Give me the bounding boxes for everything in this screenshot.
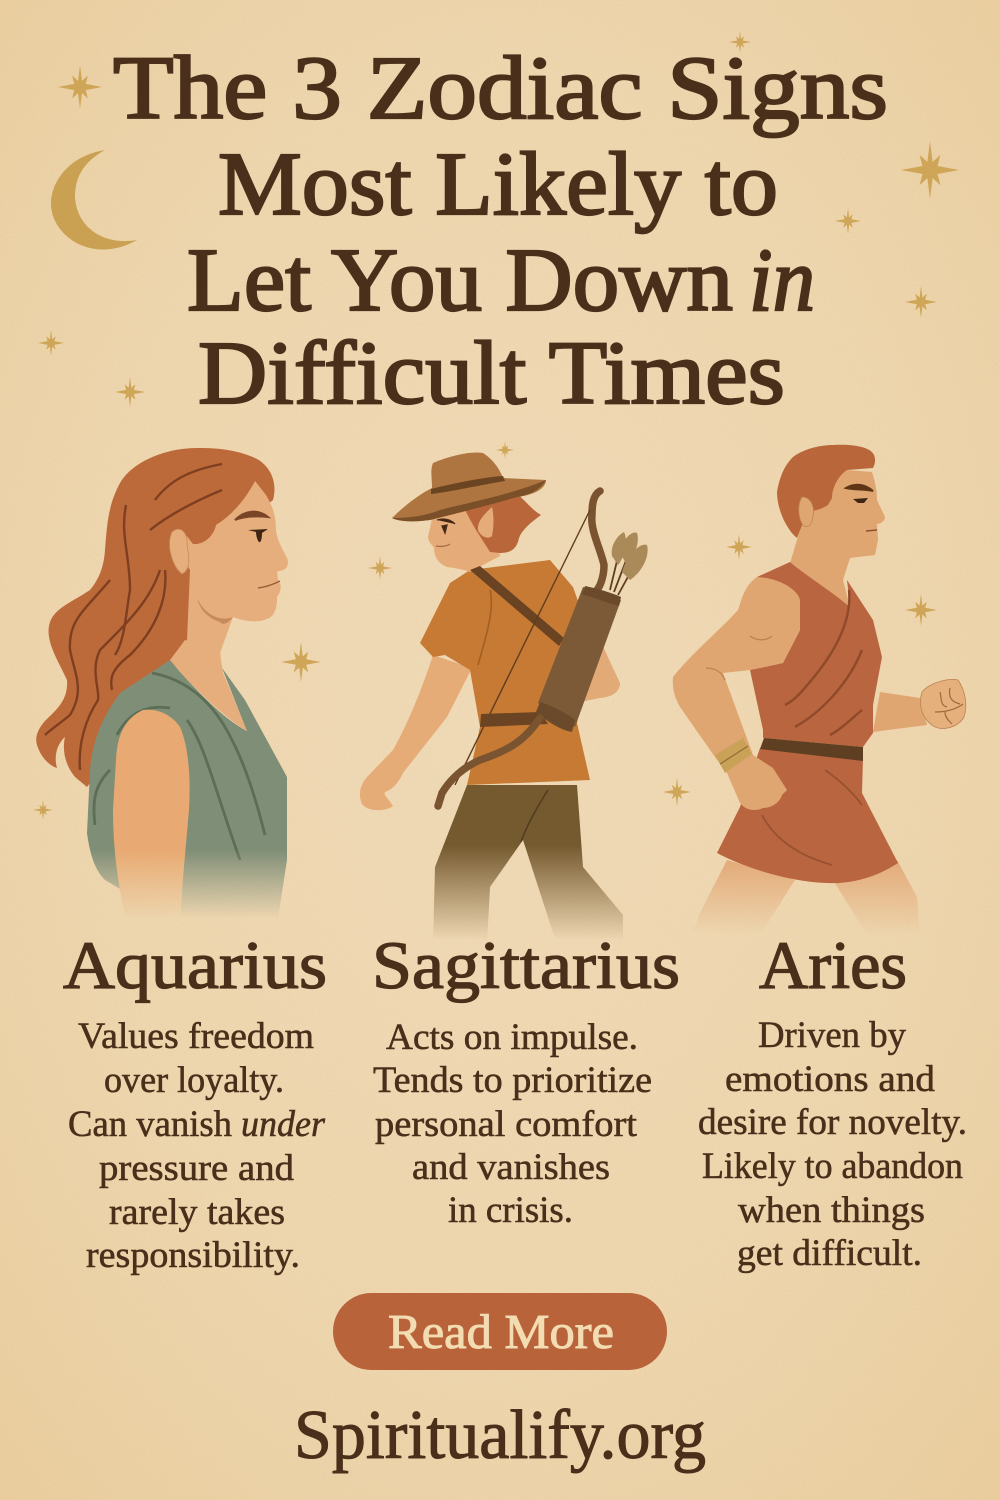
ear bbox=[799, 497, 813, 527]
eye, brow bbox=[437, 519, 455, 533]
ear bbox=[478, 507, 494, 538]
bare arm bbox=[113, 710, 190, 925]
button: Read More bbox=[333, 1293, 667, 1370]
description: Aquarius: rarely takes bbox=[109, 1192, 285, 1233]
bow and string bbox=[592, 491, 604, 590]
illustration: Sagittarius archer bbox=[360, 453, 648, 945]
trousers bbox=[433, 785, 623, 945]
hat bbox=[392, 453, 546, 521]
panel: Aries bbox=[698, 927, 967, 1274]
belt bbox=[760, 738, 863, 761]
neck and face bbox=[170, 481, 288, 730]
chest strap bbox=[470, 566, 564, 646]
front arm bbox=[360, 655, 472, 810]
description: Aquarius: responsibility. bbox=[86, 1235, 300, 1276]
description: Aries: Likely to abandon bbox=[702, 1146, 963, 1187]
panel: Aquarius bbox=[63, 927, 327, 1276]
title: Most Likely to bbox=[218, 135, 778, 234]
title: The 3 Zodiac Signs bbox=[113, 39, 888, 138]
description: Aries: desire for novelty. bbox=[698, 1102, 967, 1143]
lower bow limb bbox=[438, 718, 540, 806]
description: Sagittarius bbox=[373, 1017, 652, 1231]
right forearm bbox=[873, 692, 927, 732]
description: Aquarius: under bbox=[241, 1104, 326, 1145]
neck v bbox=[170, 640, 247, 731]
sign name: Sagittarius: Sagittarius bbox=[372, 927, 680, 1003]
hair bbox=[777, 445, 875, 538]
description: Aries: Driven by bbox=[758, 1015, 906, 1056]
sign name: Aries: Aries bbox=[759, 927, 907, 1003]
sign name: Aquarius: Aquarius bbox=[63, 927, 327, 1003]
icon: crescent moon bbox=[51, 150, 137, 249]
description: Aries: when things bbox=[738, 1190, 925, 1231]
hair strands bbox=[45, 464, 222, 770]
back arm bbox=[584, 648, 620, 701]
illustration: Aries runner bbox=[673, 445, 966, 935]
left arm bbox=[673, 577, 800, 810]
panel: Sagittarius bbox=[372, 927, 680, 1231]
hair front bbox=[187, 481, 255, 544]
title: Let You Down bbox=[187, 231, 733, 330]
hair bbox=[466, 496, 541, 553]
description: Aquarius: pressure and bbox=[99, 1148, 295, 1189]
dress folds bbox=[94, 673, 265, 860]
button: Read More: Read More bbox=[388, 1304, 614, 1359]
hair bbox=[36, 448, 274, 787]
tunic bbox=[750, 562, 882, 747]
description: Aries: emotions and bbox=[725, 1059, 936, 1100]
description: Sagittarius: Acts on impulse. bbox=[386, 1017, 638, 1058]
fist bbox=[920, 680, 966, 728]
footer: site name: Spiritualify.org bbox=[294, 1397, 706, 1474]
title: Difficult Times bbox=[198, 324, 785, 423]
brow, eye, lips bbox=[235, 512, 268, 520]
title bbox=[113, 39, 888, 423]
jaw shadow bbox=[197, 598, 233, 624]
quiver bbox=[538, 587, 621, 727]
description: Sagittarius: personal comfort bbox=[375, 1104, 638, 1145]
title: in bbox=[749, 231, 815, 330]
ear bbox=[170, 529, 189, 574]
illustration: Aquarius woman bbox=[36, 448, 288, 925]
description: Sagittarius: Tends to prioritize bbox=[373, 1060, 652, 1101]
green dress bbox=[87, 660, 287, 925]
waist belt bbox=[480, 712, 548, 727]
face details bbox=[846, 485, 873, 491]
description: Aries bbox=[698, 1015, 967, 1274]
faded legs bbox=[692, 860, 920, 935]
gold bracelet bbox=[715, 738, 752, 773]
description: Sagittarius: and vanishes bbox=[412, 1147, 610, 1188]
description: Sagittarius: in crisis. bbox=[448, 1190, 573, 1231]
description: Aquarius bbox=[68, 1016, 326, 1276]
neck and face bbox=[790, 470, 885, 607]
description: Aquarius: over loyalty. bbox=[104, 1060, 284, 1101]
description: Aquarius: Can vanish bbox=[68, 1104, 232, 1145]
skirt bbox=[717, 748, 898, 883]
description: Aquarius: Values freedom bbox=[78, 1016, 314, 1057]
decorative gold stars bbox=[33, 31, 959, 820]
description: Aries: get difficult. bbox=[737, 1233, 922, 1274]
arrows bbox=[609, 561, 628, 596]
neck and face bbox=[428, 511, 500, 572]
tunic bbox=[420, 560, 592, 785]
